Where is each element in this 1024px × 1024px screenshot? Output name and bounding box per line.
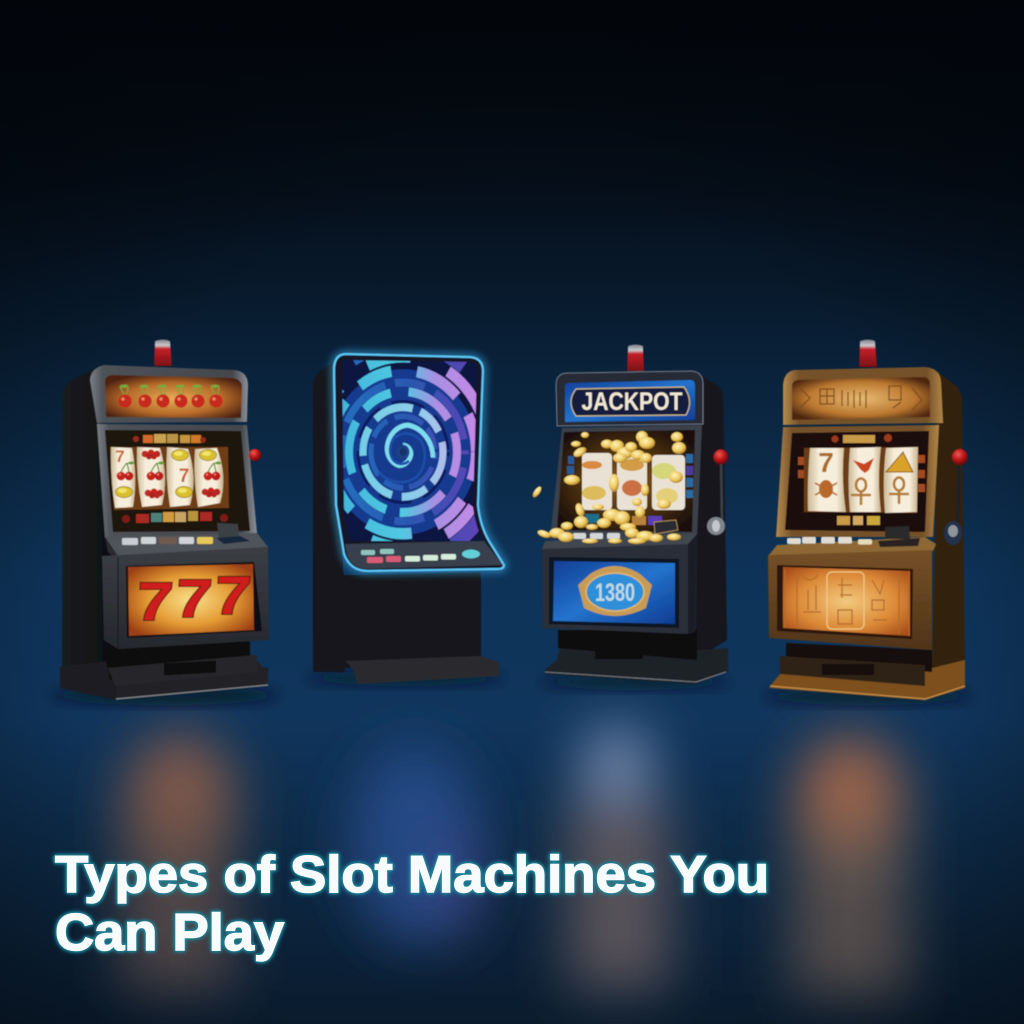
screen bezel xyxy=(334,354,504,571)
spiral display xyxy=(342,359,483,542)
beacon xyxy=(627,344,644,371)
top sign frame xyxy=(556,371,703,426)
side cabinet xyxy=(695,375,727,660)
dark vortex centre xyxy=(396,445,410,459)
row of cherries xyxy=(118,384,223,408)
beacon xyxy=(859,340,877,367)
reel window frame xyxy=(776,425,939,537)
dark side cabinet xyxy=(62,366,120,668)
contact shadow xyxy=(50,685,280,705)
outer segmented rings xyxy=(342,359,480,542)
dark side cabinet xyxy=(313,355,345,672)
title: Types of Slot Machines You xyxy=(55,846,769,904)
contact shadow xyxy=(763,687,973,705)
reel 1 xyxy=(111,447,135,508)
jackpot sign xyxy=(565,380,695,422)
lower 777 panel xyxy=(126,562,262,638)
777 numerals: 7 xyxy=(134,571,175,632)
contact shadow xyxy=(305,670,505,686)
reel window frame xyxy=(97,424,257,538)
jackpot text: JACKPOT xyxy=(582,388,682,416)
control deck xyxy=(542,533,697,549)
card reader xyxy=(217,523,239,538)
machine 3: jackpot slot with spilling coins xyxy=(531,344,730,690)
pedestal base xyxy=(345,656,499,684)
reflection: classic machine xyxy=(122,732,236,990)
lower jackpot panel xyxy=(549,557,679,628)
reel bed xyxy=(110,447,229,510)
lower cavity and tray xyxy=(786,643,932,672)
machine 1: classic fruit slot xyxy=(50,340,280,705)
indicator lights, bottom xyxy=(122,511,228,523)
reel 2: bird and ankh xyxy=(848,447,881,512)
flying coin xyxy=(531,485,543,499)
red beacon xyxy=(154,340,172,366)
side lights xyxy=(567,454,693,525)
reel bed xyxy=(804,447,918,513)
machine 4: Egyptian themed slot xyxy=(763,340,973,705)
deck buttons xyxy=(361,549,480,563)
lower cabinet xyxy=(102,547,269,649)
reel 2 xyxy=(137,447,165,507)
deck buttons xyxy=(122,537,213,545)
filled disc under the rings xyxy=(329,369,477,535)
inner spiral bands xyxy=(379,425,433,482)
reel 4 xyxy=(194,448,223,507)
floor reflections of the machines xyxy=(122,723,908,995)
control deck xyxy=(105,533,268,556)
machine 2: modern video slot with spiral screen xyxy=(305,343,505,686)
control deck xyxy=(768,537,936,556)
lower cabinet xyxy=(542,544,688,634)
reels xyxy=(582,453,685,510)
carved glyphs xyxy=(785,570,909,636)
red lever knob xyxy=(249,449,261,461)
reel window with warm glow xyxy=(557,430,695,532)
reel 3: pyramid and ankh xyxy=(884,447,918,513)
lever xyxy=(944,449,968,545)
deck buttons xyxy=(787,537,872,544)
reel 1: seven and scarab xyxy=(808,447,846,512)
neon glow xyxy=(334,354,504,571)
jackpot amount: 1380 xyxy=(595,579,635,607)
deck buttons xyxy=(573,533,620,539)
coin shower xyxy=(564,431,686,531)
lower cabinet xyxy=(338,572,481,668)
reel fruit clusters xyxy=(582,459,678,504)
side cabinet xyxy=(932,372,965,672)
top sign frame xyxy=(783,367,943,425)
lever xyxy=(707,450,728,535)
title xyxy=(55,846,769,962)
reflection: Egyptian machine xyxy=(792,734,908,995)
indicator lights xyxy=(798,434,925,525)
card reader xyxy=(654,520,678,534)
reel 3 xyxy=(166,447,194,507)
title: Can Play xyxy=(55,904,284,962)
carved glyphs xyxy=(800,386,922,410)
reel window frame xyxy=(550,425,702,539)
reel window xyxy=(785,431,929,532)
button deck xyxy=(345,541,503,569)
hieroglyph lower panel xyxy=(777,565,913,639)
neon screen outline xyxy=(334,354,504,571)
base plinth xyxy=(60,660,268,700)
reel window xyxy=(105,430,250,532)
reflection: jackpot machine xyxy=(568,723,670,990)
top sign frame xyxy=(90,365,248,423)
reel 1: seven and scarab: 7 xyxy=(818,447,834,478)
base plinth xyxy=(770,660,965,700)
reflection: video machine xyxy=(349,745,481,945)
777 numerals: 7 xyxy=(212,565,253,626)
base plinth xyxy=(545,648,728,684)
contact shadow xyxy=(540,674,730,690)
reel 3: 7 xyxy=(179,466,189,487)
cherry sign xyxy=(105,375,242,418)
lower cavity xyxy=(558,630,697,660)
hieroglyph sign xyxy=(792,377,930,420)
lower cabinet xyxy=(768,550,932,650)
reel 1: 7 xyxy=(115,447,125,466)
777 numerals: 7 xyxy=(173,568,214,629)
777 numerals xyxy=(134,565,253,632)
coin pile on deck xyxy=(536,522,681,544)
card reader xyxy=(878,526,920,547)
pill plate xyxy=(571,387,690,416)
lower cavity and coin tray xyxy=(103,640,250,680)
indicator lights, top xyxy=(133,434,206,443)
